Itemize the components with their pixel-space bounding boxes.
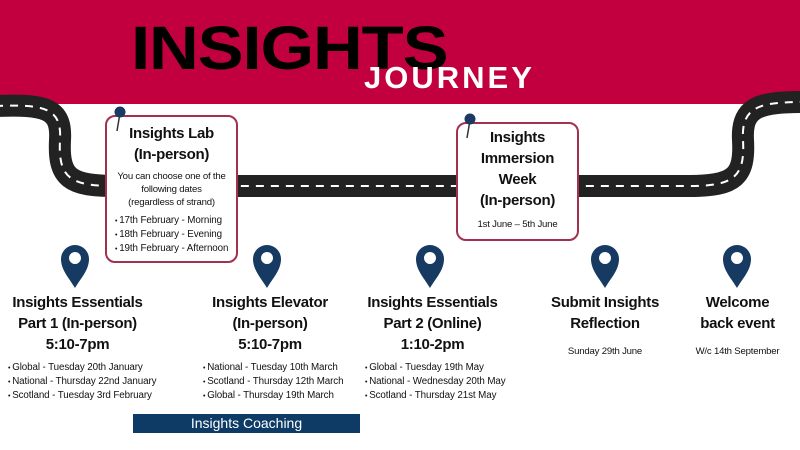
coaching bar: Insights Coaching bbox=[191, 415, 302, 431]
panel: insights lab: 17th February - Morning bbox=[119, 215, 222, 226]
coaching bar bbox=[133, 414, 360, 433]
step: essentials part 2: Global - Tuesday 19th May bbox=[369, 362, 484, 373]
panel: immersion week bbox=[456, 122, 579, 241]
panel: immersion week: 1st June – 5th June bbox=[478, 219, 557, 230]
title: INSIGHTS: INSIGHTS bbox=[131, 14, 448, 82]
step: essentials part 1 bbox=[8, 294, 156, 401]
step: essentials part 2: Part 2 (Online) bbox=[383, 315, 482, 332]
panel: insights lab: 18th February - Evening bbox=[119, 229, 222, 240]
step: essentials part 1: Global - Tuesday 20th January bbox=[12, 362, 143, 373]
step: elevator: Global - Thursday 19th March bbox=[207, 390, 334, 401]
title: JOURNEY: JOURNEY bbox=[364, 60, 535, 95]
step: elevator: National - Tuesday 10th March bbox=[207, 362, 338, 373]
panel: immersion week: Insights bbox=[490, 129, 545, 146]
panel: immersion week: (In-person) bbox=[480, 192, 555, 209]
step: elevator: Scotland - Thursday 12th March bbox=[207, 376, 343, 387]
panel: insights lab: (regardless of strand) bbox=[128, 197, 215, 208]
step: elevator bbox=[203, 294, 343, 401]
panel: insights lab: Insights Lab bbox=[129, 125, 214, 142]
step: elevator: 5:10-7pm bbox=[238, 336, 302, 353]
step: reflection: Sunday 29th June bbox=[568, 346, 642, 357]
step: reflection: Submit Insights bbox=[551, 294, 659, 311]
panel: insights lab bbox=[105, 115, 238, 263]
step: essentials part 1: Scotland - Tuesday 3rd February bbox=[12, 390, 152, 401]
panel: immersion week: Immersion bbox=[481, 150, 554, 167]
step: elevator: (In-person) bbox=[232, 315, 308, 332]
panel: insights lab: You can choose one of the bbox=[117, 171, 226, 182]
step: elevator: Insights Elevator bbox=[212, 294, 328, 311]
step: essentials part 2: Insights Essentials bbox=[367, 294, 498, 311]
panel: insights lab: 19th February - Afternoon bbox=[119, 243, 228, 254]
step: essentials part 1: Insights Essentials bbox=[12, 294, 143, 311]
panel: insights lab: (In-person) bbox=[134, 146, 209, 163]
step: essentials part 2: 1:10-2pm bbox=[401, 336, 464, 353]
icon: pushpin lab bbox=[114, 106, 126, 132]
step: welcome back bbox=[696, 294, 780, 357]
step: essentials part 1: 5:10-7pm bbox=[46, 336, 109, 353]
icon: pushpin immersion bbox=[464, 114, 476, 138]
icon: map pins bbox=[61, 245, 751, 288]
step: reflection: Reflection bbox=[570, 315, 640, 332]
step: reflection bbox=[551, 294, 659, 357]
step: essentials part 1: Part 1 (In-person) bbox=[18, 315, 137, 332]
step: essentials part 2 bbox=[365, 294, 506, 401]
step: essentials part 2: National - Wednesday 20th May bbox=[369, 376, 506, 387]
step: welcome back: back event bbox=[700, 315, 775, 332]
step: welcome back: W/c 14th September bbox=[696, 346, 779, 357]
step: essentials part 2: Scotland - Thursday 21st May bbox=[369, 390, 496, 401]
header band bbox=[0, 0, 800, 104]
panel: immersion week: Week bbox=[499, 171, 536, 188]
step: welcome back: Welcome bbox=[706, 294, 769, 311]
step: essentials part 1: National - Thursday 22nd January bbox=[12, 376, 156, 387]
panel: insights lab: following dates bbox=[141, 184, 202, 195]
